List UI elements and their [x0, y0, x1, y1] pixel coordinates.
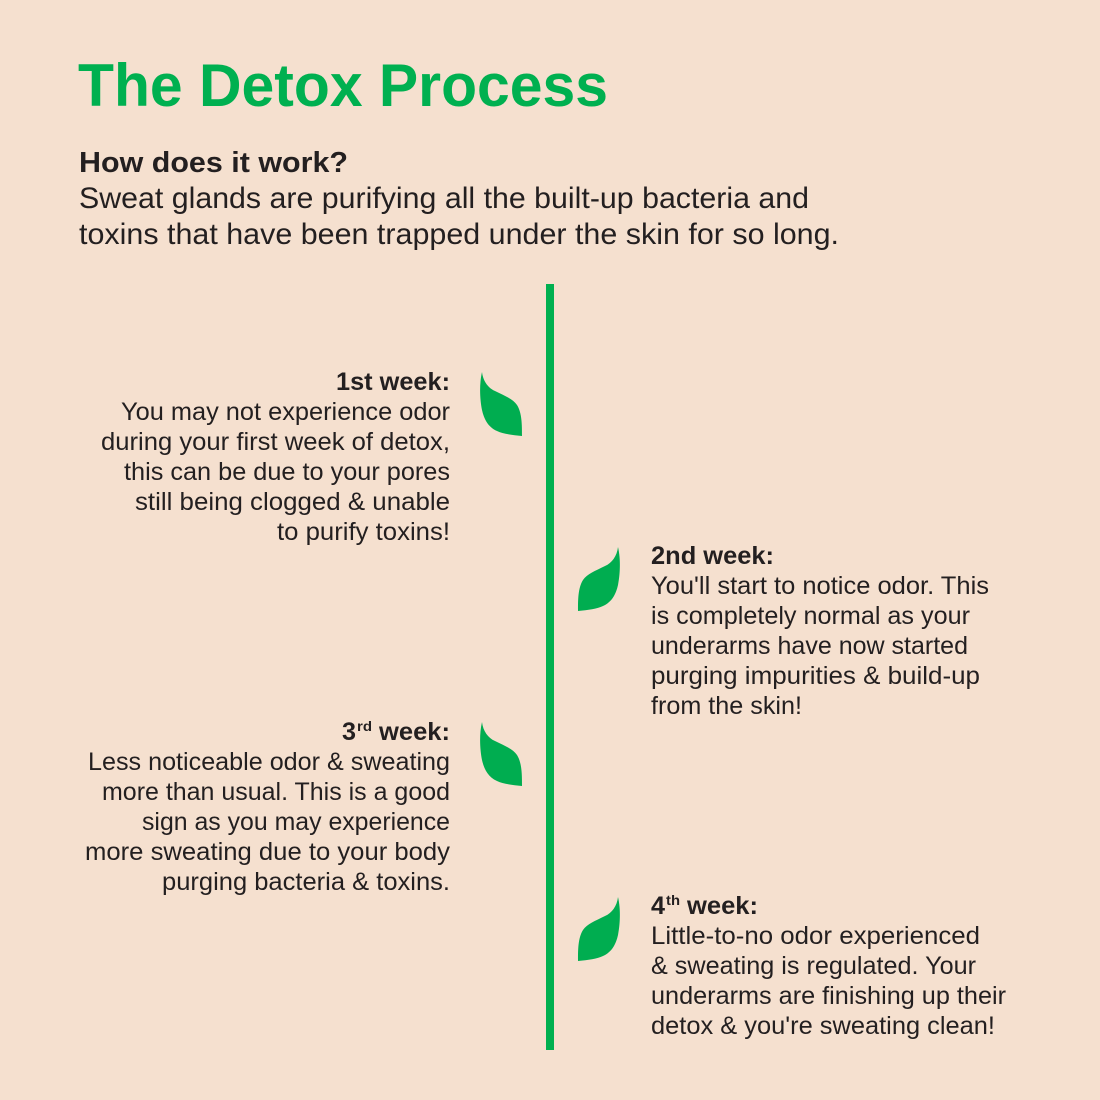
text: week 3: more than usual. This is a good: [102, 778, 450, 806]
text: week 3: Less noticeable odor & sweating: [88, 748, 450, 776]
text: week 4: underarms are finishing up their: [651, 982, 1006, 1010]
text: week 4: detox & you're sweating clean!: [651, 1012, 995, 1040]
text: week 3: more sweating due to your body: [85, 838, 451, 866]
text: week 3: rd: [357, 718, 372, 734]
text: week 4: & sweating is regulated. Your: [651, 952, 976, 980]
text: week 3: purging bacteria & toxins.: [162, 868, 450, 896]
text: week 2: purging impurities & build-up: [651, 662, 980, 690]
text: week 2: underarms have now started: [651, 632, 968, 660]
text: week 4: week:: [686, 892, 758, 920]
text: week 4: Little-to-no odor experienced: [651, 922, 980, 950]
icon: leaf week 2: [578, 547, 620, 611]
text: week 1: to purify toxins!: [277, 518, 450, 546]
text: week 1: during your first week of detox,: [101, 428, 450, 456]
text: week 2: You'll start to notice odor. This: [651, 572, 989, 600]
text: week 3: week:: [378, 718, 450, 746]
timeline vertical line: [546, 284, 554, 1050]
intro text block: Sweat glands are purifying all the built-up bacteria and: [79, 182, 809, 215]
text: week 3: [85, 718, 451, 896]
text: week 1: this can be due to your pores: [124, 458, 450, 486]
text: week 1: You may not experience odor: [121, 398, 450, 426]
text: week 3: sign as you may experience: [142, 808, 450, 836]
text: week 2: [651, 542, 989, 720]
text: week 4: th: [666, 892, 680, 908]
text: week 2: 2nd week:: [651, 542, 774, 570]
text: week 4: [651, 892, 1006, 1040]
icon: leaf week 1: [480, 372, 522, 436]
text: week 1: 1st week:: [336, 368, 450, 396]
title: The Detox Process: [78, 52, 608, 119]
text: week 3: 3: [342, 718, 356, 746]
text: week 1: [101, 368, 450, 546]
intro text block: toxins that have been trapped under the skin for so long.: [79, 218, 839, 251]
intro text block: [79, 147, 839, 251]
intro text block: How does it work?: [79, 147, 348, 179]
icon: leaf week 3: [480, 722, 522, 786]
text: week 2: is completely normal as your: [651, 602, 970, 630]
text: week 1: still being clogged & unable: [135, 488, 450, 516]
icon: leaf week 4: [578, 897, 620, 961]
text: week 2: from the skin!: [651, 692, 802, 720]
text: week 4: 4: [651, 892, 665, 920]
